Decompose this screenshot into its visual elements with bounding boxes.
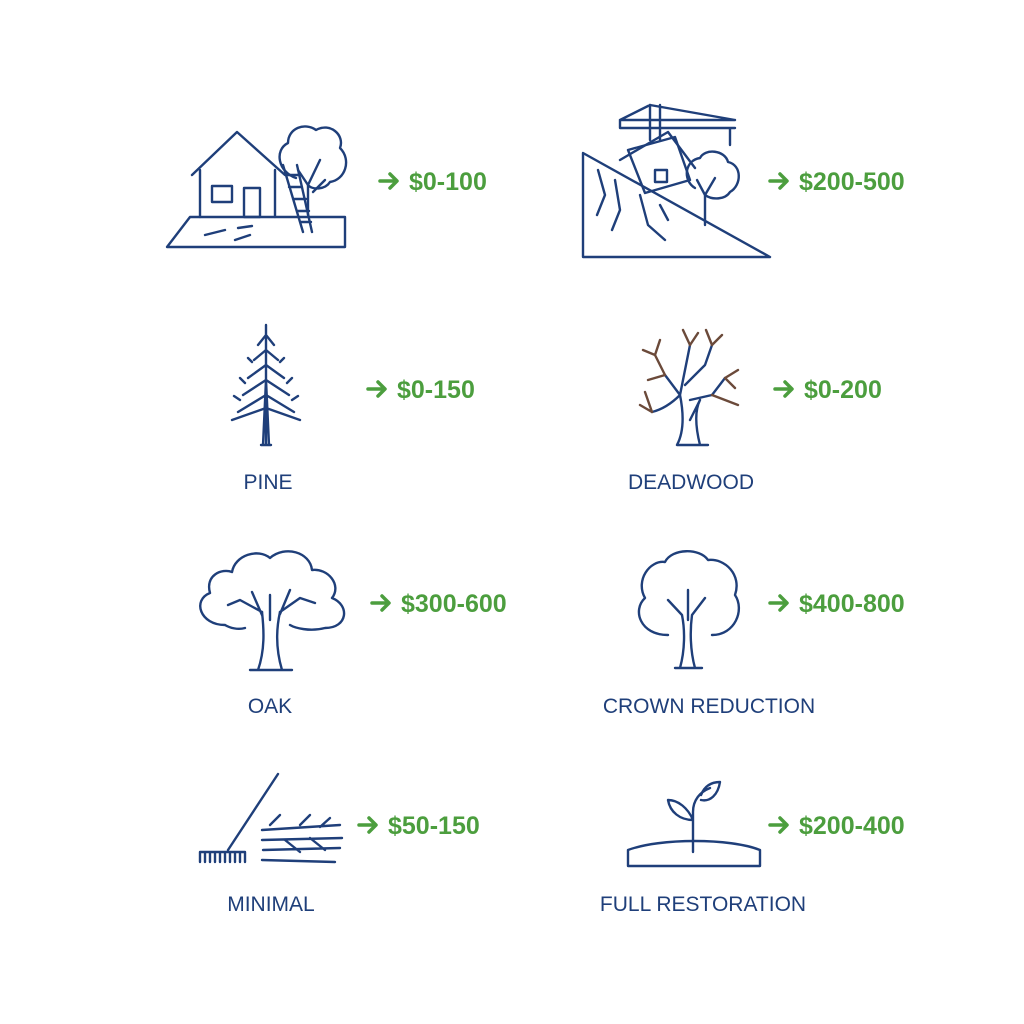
price: $300-600: $300-600 (401, 590, 507, 618)
icon: deadwood (640, 330, 738, 445)
icon: pine (232, 325, 300, 445)
price: $0-200: $0-200 (804, 376, 882, 404)
price: $400-800: $400-800 (799, 590, 905, 618)
label: OAK: OAK (248, 695, 292, 718)
price: $50-150: $50-150 (388, 812, 480, 840)
icon: house with ladder and tree (167, 126, 346, 247)
icon: rake and branches (200, 774, 342, 862)
label: PINE: PINE (243, 471, 293, 494)
label: CROWN REDUCTION: CROWN REDUCTION (603, 695, 815, 718)
price: $0-150: $0-150 (397, 376, 475, 404)
icon: sapling in soil (628, 782, 760, 866)
price: $0-100: $0-100 (409, 168, 487, 196)
price: $200-400: $200-400 (799, 812, 905, 840)
label: DEADWOOD: DEADWOOD (628, 471, 754, 494)
price: $200-500: $200-500 (799, 168, 905, 196)
icon: crown reduction tree (639, 551, 739, 668)
icon: oak (200, 551, 344, 670)
label: MINIMAL: MINIMAL (227, 893, 315, 916)
label: FULL RESTORATION: FULL RESTORATION (600, 893, 806, 916)
icon: house on slope with crane (583, 105, 770, 257)
